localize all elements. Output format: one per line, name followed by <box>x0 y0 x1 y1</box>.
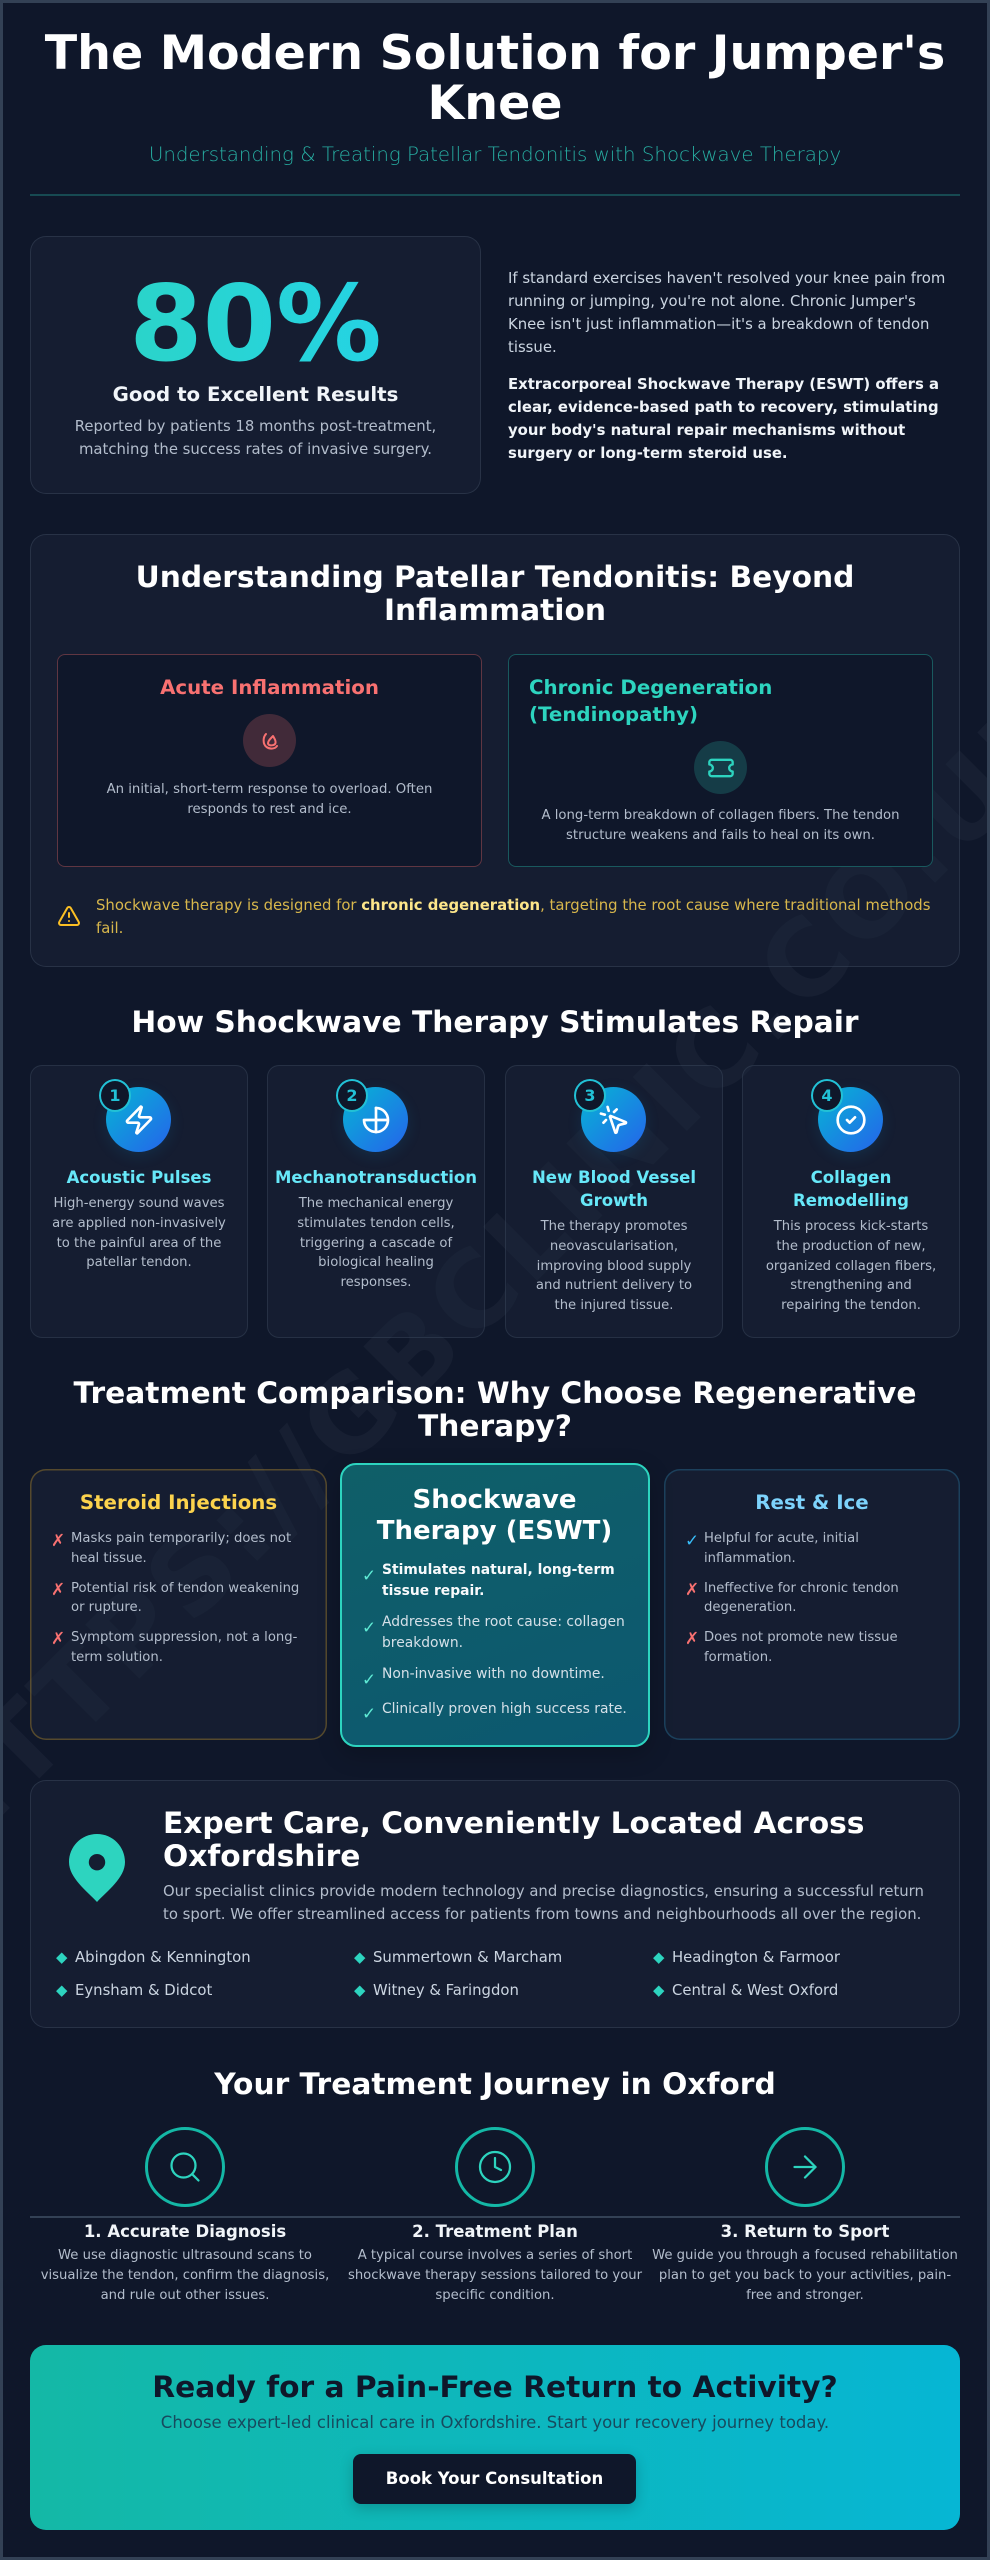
location list: Headington & Farmoor <box>672 1948 840 1966</box>
step text: stimulates tendon cells, <box>297 1216 455 1231</box>
list <box>685 1530 899 1665</box>
list: Clinically proven high success rate. <box>382 1701 627 1717</box>
card heading: Acute Inflammation <box>160 676 379 699</box>
panel heading: Oxfordshire <box>163 1839 360 1874</box>
heading: treatment comparison: Treatment Comparison: Why Choose Regenerative <box>74 1376 916 1411</box>
callout: warning <box>58 896 930 936</box>
statistic description: Reported by patients 18 months post-treatment, <box>75 417 436 435</box>
intro text: tissue. <box>508 338 557 356</box>
list: ✗ <box>685 1579 699 1599</box>
list: ✗ <box>51 1628 65 1648</box>
panel heading: Steroid Injections <box>80 1491 277 1514</box>
step text: responses. <box>341 1275 411 1290</box>
step heading <box>532 1168 696 1210</box>
step text: High-energy sound waves <box>53 1196 225 1211</box>
statistic number: 80% <box>129 262 382 385</box>
panel heading: Expert Care, Conveniently Located Across <box>163 1806 864 1841</box>
cta heading: Ready for a Pain-Free Return to Activity? <box>152 2370 838 2405</box>
icon: clock <box>455 2127 535 2207</box>
location list <box>56 1948 840 1999</box>
callout text: Shockwave therapy is designed for chronic degeneration, targeting the root cause where traditional methods <box>96 896 930 914</box>
step text: strengthening and <box>790 1278 912 1293</box>
list: heal tissue. <box>71 1551 147 1566</box>
location list: Summertown & Marcham <box>373 1948 562 1966</box>
panel text <box>163 1882 924 1922</box>
button: Book Your Consultation <box>386 2469 603 2488</box>
step text: plan: A typical course involves a series of short <box>358 2248 632 2263</box>
card: step 4 collagen remodelling <box>742 1065 960 1338</box>
panel heading: Rest & Ice <box>755 1491 869 1514</box>
intro bold text <box>508 374 939 462</box>
step heading: Remodelling <box>793 1190 909 1210</box>
location list: ◆ <box>56 1981 67 1999</box>
icon: pointer click <box>581 1087 646 1152</box>
list: Potential risk of tendon weakening <box>71 1580 299 1596</box>
step heading: return: 3. Return to Sport <box>721 2222 889 2241</box>
step heading: Acoustic Pulses <box>67 1168 211 1186</box>
step text <box>536 1219 692 1313</box>
step text: patellar tendon. <box>86 1255 192 1270</box>
list: tissue repair. <box>382 1583 484 1599</box>
step text: The therapy promotes <box>541 1219 687 1234</box>
title: Knee <box>427 76 563 131</box>
panel: expert care locations <box>30 1780 960 2028</box>
step text: plan <box>348 2248 642 2303</box>
icon: segmented circle <box>343 1087 408 1152</box>
step text: return: free and stronger. <box>746 2288 864 2303</box>
card text: An initial, short-term response to overload. Often <box>107 782 432 797</box>
icon: arrow right <box>765 2127 845 2207</box>
card: step 3 new blood vessel growth <box>505 1065 723 1338</box>
panel: understanding patellar tendonitis <box>30 534 960 967</box>
step text: biological healing <box>318 1255 434 1270</box>
intro bold text: clear, evidence-based path to recovery, stimulating <box>508 398 939 416</box>
list: term solution. <box>71 1650 163 1665</box>
heading: how shockwave works: How Shockwave Therapy Stimulates Repair <box>131 1004 859 1040</box>
panel: steroid injections <box>30 1469 327 1740</box>
list: breakdown. <box>382 1635 463 1651</box>
statistic label: Good to Excellent Results <box>113 383 398 406</box>
number badge <box>336 1079 368 1112</box>
step text <box>297 1196 455 1290</box>
card text <box>106 782 432 817</box>
card heading: (Tendinopathy) <box>529 703 698 726</box>
icon: lightning bolt <box>106 1087 171 1152</box>
button <box>353 2454 636 2504</box>
icon: ticket <box>694 741 747 794</box>
list: ✓ <box>685 1530 699 1550</box>
intro text: running or jumping, you're not alone. Chronic Jumper's <box>508 292 916 310</box>
card text: A long-term breakdown of collagen fibers. The tendon <box>541 808 900 823</box>
panel: shockwave therapy <box>340 1463 650 1747</box>
card text: responds to rest and ice. <box>187 802 352 817</box>
list: Helpful for acute, initial <box>704 1531 859 1546</box>
step text: are applied non-invasively <box>52 1216 226 1231</box>
list: inflammation. <box>704 1551 796 1566</box>
list: Ineffective for chronic tendon <box>704 1580 899 1596</box>
list: Stimulates natural, long-term <box>382 1562 615 1578</box>
step text: This process kick-starts <box>774 1219 928 1234</box>
step text: return <box>652 2248 958 2303</box>
heading: treatment journey: Your Treatment Journey in Oxford <box>214 2066 776 2102</box>
list: Non-invasive with no downtime. <box>382 1666 605 1682</box>
list <box>51 1530 299 1665</box>
icon: check circle <box>818 1087 883 1152</box>
list: Addresses the root cause: collagen <box>382 1614 625 1630</box>
panel heading: Therapy (ESWT) <box>377 1516 612 1546</box>
list: Masks pain temporarily; does not <box>71 1531 291 1546</box>
step heading: Collagen <box>811 1168 891 1186</box>
panel: call to action <box>30 2345 960 2530</box>
subtitle: Understanding & Treating Patellar Tendonitis with Shockwave Therapy <box>149 143 841 166</box>
step heading: plan: 2. Treatment Plan <box>412 2222 578 2241</box>
title: The Modern Solution for Jumper's <box>45 26 945 81</box>
list: ✗ <box>51 1530 65 1550</box>
location list: ◆ <box>653 1981 664 1999</box>
intro text: Knee isn't just inflammation—it's a breakdown of tendon <box>508 314 929 332</box>
number badge: 3 <box>584 1086 596 1105</box>
icon: magnifying glass <box>145 2127 225 2207</box>
card: chronic degeneration <box>508 654 933 867</box>
step text: and nutrient delivery to <box>536 1278 692 1293</box>
list: Symptom suppression, not a long- <box>71 1630 297 1645</box>
step text: plan: shockwave therapy sessions tailored to your <box>348 2268 642 2283</box>
icon: warning triangle <box>58 906 80 926</box>
panel heading <box>376 1485 612 1546</box>
card heading <box>529 676 772 726</box>
step text: return: We guide you through a focused rehabilitation <box>652 2248 958 2263</box>
step text <box>766 1219 936 1313</box>
step text: improving blood supply <box>537 1259 691 1274</box>
panel heading: Shockwave <box>413 1485 576 1515</box>
cta text: Choose expert-led clinical care in Oxfordshire. Start your recovery journey today. <box>161 2413 829 2432</box>
location list: ◆ <box>354 1948 365 1966</box>
section heading <box>136 560 854 628</box>
statistic number <box>30 271 481 377</box>
step heading <box>793 1168 909 1210</box>
callout text <box>96 896 930 936</box>
section heading: Inflammation <box>384 593 606 628</box>
list: ✓ <box>362 1565 376 1585</box>
list: ✗ <box>51 1579 65 1599</box>
list: ✓ <box>362 1703 376 1723</box>
step heading: Mechanotransduction <box>275 1168 477 1186</box>
step text: diagnosis: We use diagnostic ultrasound scans to <box>58 2248 312 2263</box>
step heading: diagnosis: 1. Accurate Diagnosis <box>84 2222 286 2241</box>
list: Does not promote new tissue <box>704 1630 898 1645</box>
location list: Eynsham & Didcot <box>75 1981 212 1999</box>
card: acute inflammation <box>57 654 482 867</box>
step text: to the painful area of the <box>57 1236 221 1251</box>
step text: organized collagen fibers, <box>766 1259 936 1274</box>
title <box>44 26 945 131</box>
step text: plan: specific condition. <box>435 2288 555 2303</box>
location list: ◆ <box>653 1948 664 1966</box>
list: ✓ <box>362 1617 376 1637</box>
panel: 80% statistic <box>30 236 481 494</box>
step heading: New Blood Vessel <box>532 1168 696 1186</box>
step text: the production of new, <box>776 1239 926 1254</box>
list: ✗ <box>685 1628 699 1648</box>
number badge <box>99 1079 131 1112</box>
section heading: Understanding Patellar Tendonitis: Beyond <box>136 560 854 595</box>
step text: diagnosis <box>41 2248 329 2303</box>
location list: Central & West Oxford <box>672 1981 838 1999</box>
step text: diagnosis: visualize the tendon, confirm the diagnosis, <box>41 2268 329 2283</box>
intro text <box>508 268 945 356</box>
number badge: 2 <box>346 1086 358 1105</box>
step text: neovascularisation, <box>550 1239 678 1254</box>
card text <box>541 808 900 843</box>
card: step 2 mechanotransduction <box>267 1065 485 1338</box>
panel: rest and ice <box>664 1469 960 1740</box>
heading: treatment comparison: Therapy? <box>418 1409 572 1444</box>
statistic description <box>75 417 436 458</box>
heading: treatment comparison <box>74 1376 916 1444</box>
panel heading <box>163 1806 864 1874</box>
icon: flame <box>243 714 296 767</box>
list: formation. <box>704 1650 772 1665</box>
panel text: to sport. We offer streamlined access for patients from towns and neighbourhoods all over the region. <box>163 1904 921 1922</box>
step text: the injured tissue. <box>555 1298 673 1313</box>
intro text: If standard exercises haven't resolved your knee pain from <box>508 268 945 286</box>
step text: diagnosis: and rule out other issues. <box>101 2288 269 2303</box>
list: degeneration. <box>704 1600 796 1615</box>
location list: ◆ <box>56 1948 67 1966</box>
card: step 1 acoustic pulses <box>30 1065 248 1338</box>
step text <box>52 1196 226 1270</box>
card heading: Chronic Degeneration <box>529 676 772 699</box>
number badge: 4 <box>821 1086 833 1105</box>
step text: repairing the tendon. <box>781 1298 921 1313</box>
step text: triggering a cascade of <box>300 1236 452 1251</box>
icon: map pin <box>69 1834 125 1902</box>
number badge <box>811 1079 843 1112</box>
statistic description: matching the success rates of invasive surgery. <box>79 440 432 458</box>
step text: The mechanical energy <box>299 1196 453 1211</box>
intro bold text: your body's natural repair mechanisms without <box>508 420 905 438</box>
callout text: fail. <box>96 918 123 936</box>
intro bold text: Extracorporeal Shockwave Therapy (ESWT) offers a <box>508 374 939 392</box>
list <box>362 1562 627 1723</box>
step heading: Growth <box>580 1190 648 1210</box>
number badge: 1 <box>109 1086 121 1105</box>
panel text: Our specialist clinics provide modern technology and precise diagnostics, ensuring a successful return <box>163 1882 924 1900</box>
list: ✓ <box>362 1669 376 1689</box>
step text: return: plan to get you back to your activities, pain- <box>659 2268 951 2283</box>
list: or rupture. <box>71 1600 142 1615</box>
intro bold text: surgery or long-term steroid use. <box>508 444 788 462</box>
location list: Abingdon & Kennington <box>75 1948 251 1966</box>
card text: structure weakens and fails to heal on its own. <box>566 828 875 843</box>
location list: ◆ <box>354 1981 365 1999</box>
location list: Witney & Faringdon <box>373 1981 519 1999</box>
number badge <box>574 1079 606 1112</box>
